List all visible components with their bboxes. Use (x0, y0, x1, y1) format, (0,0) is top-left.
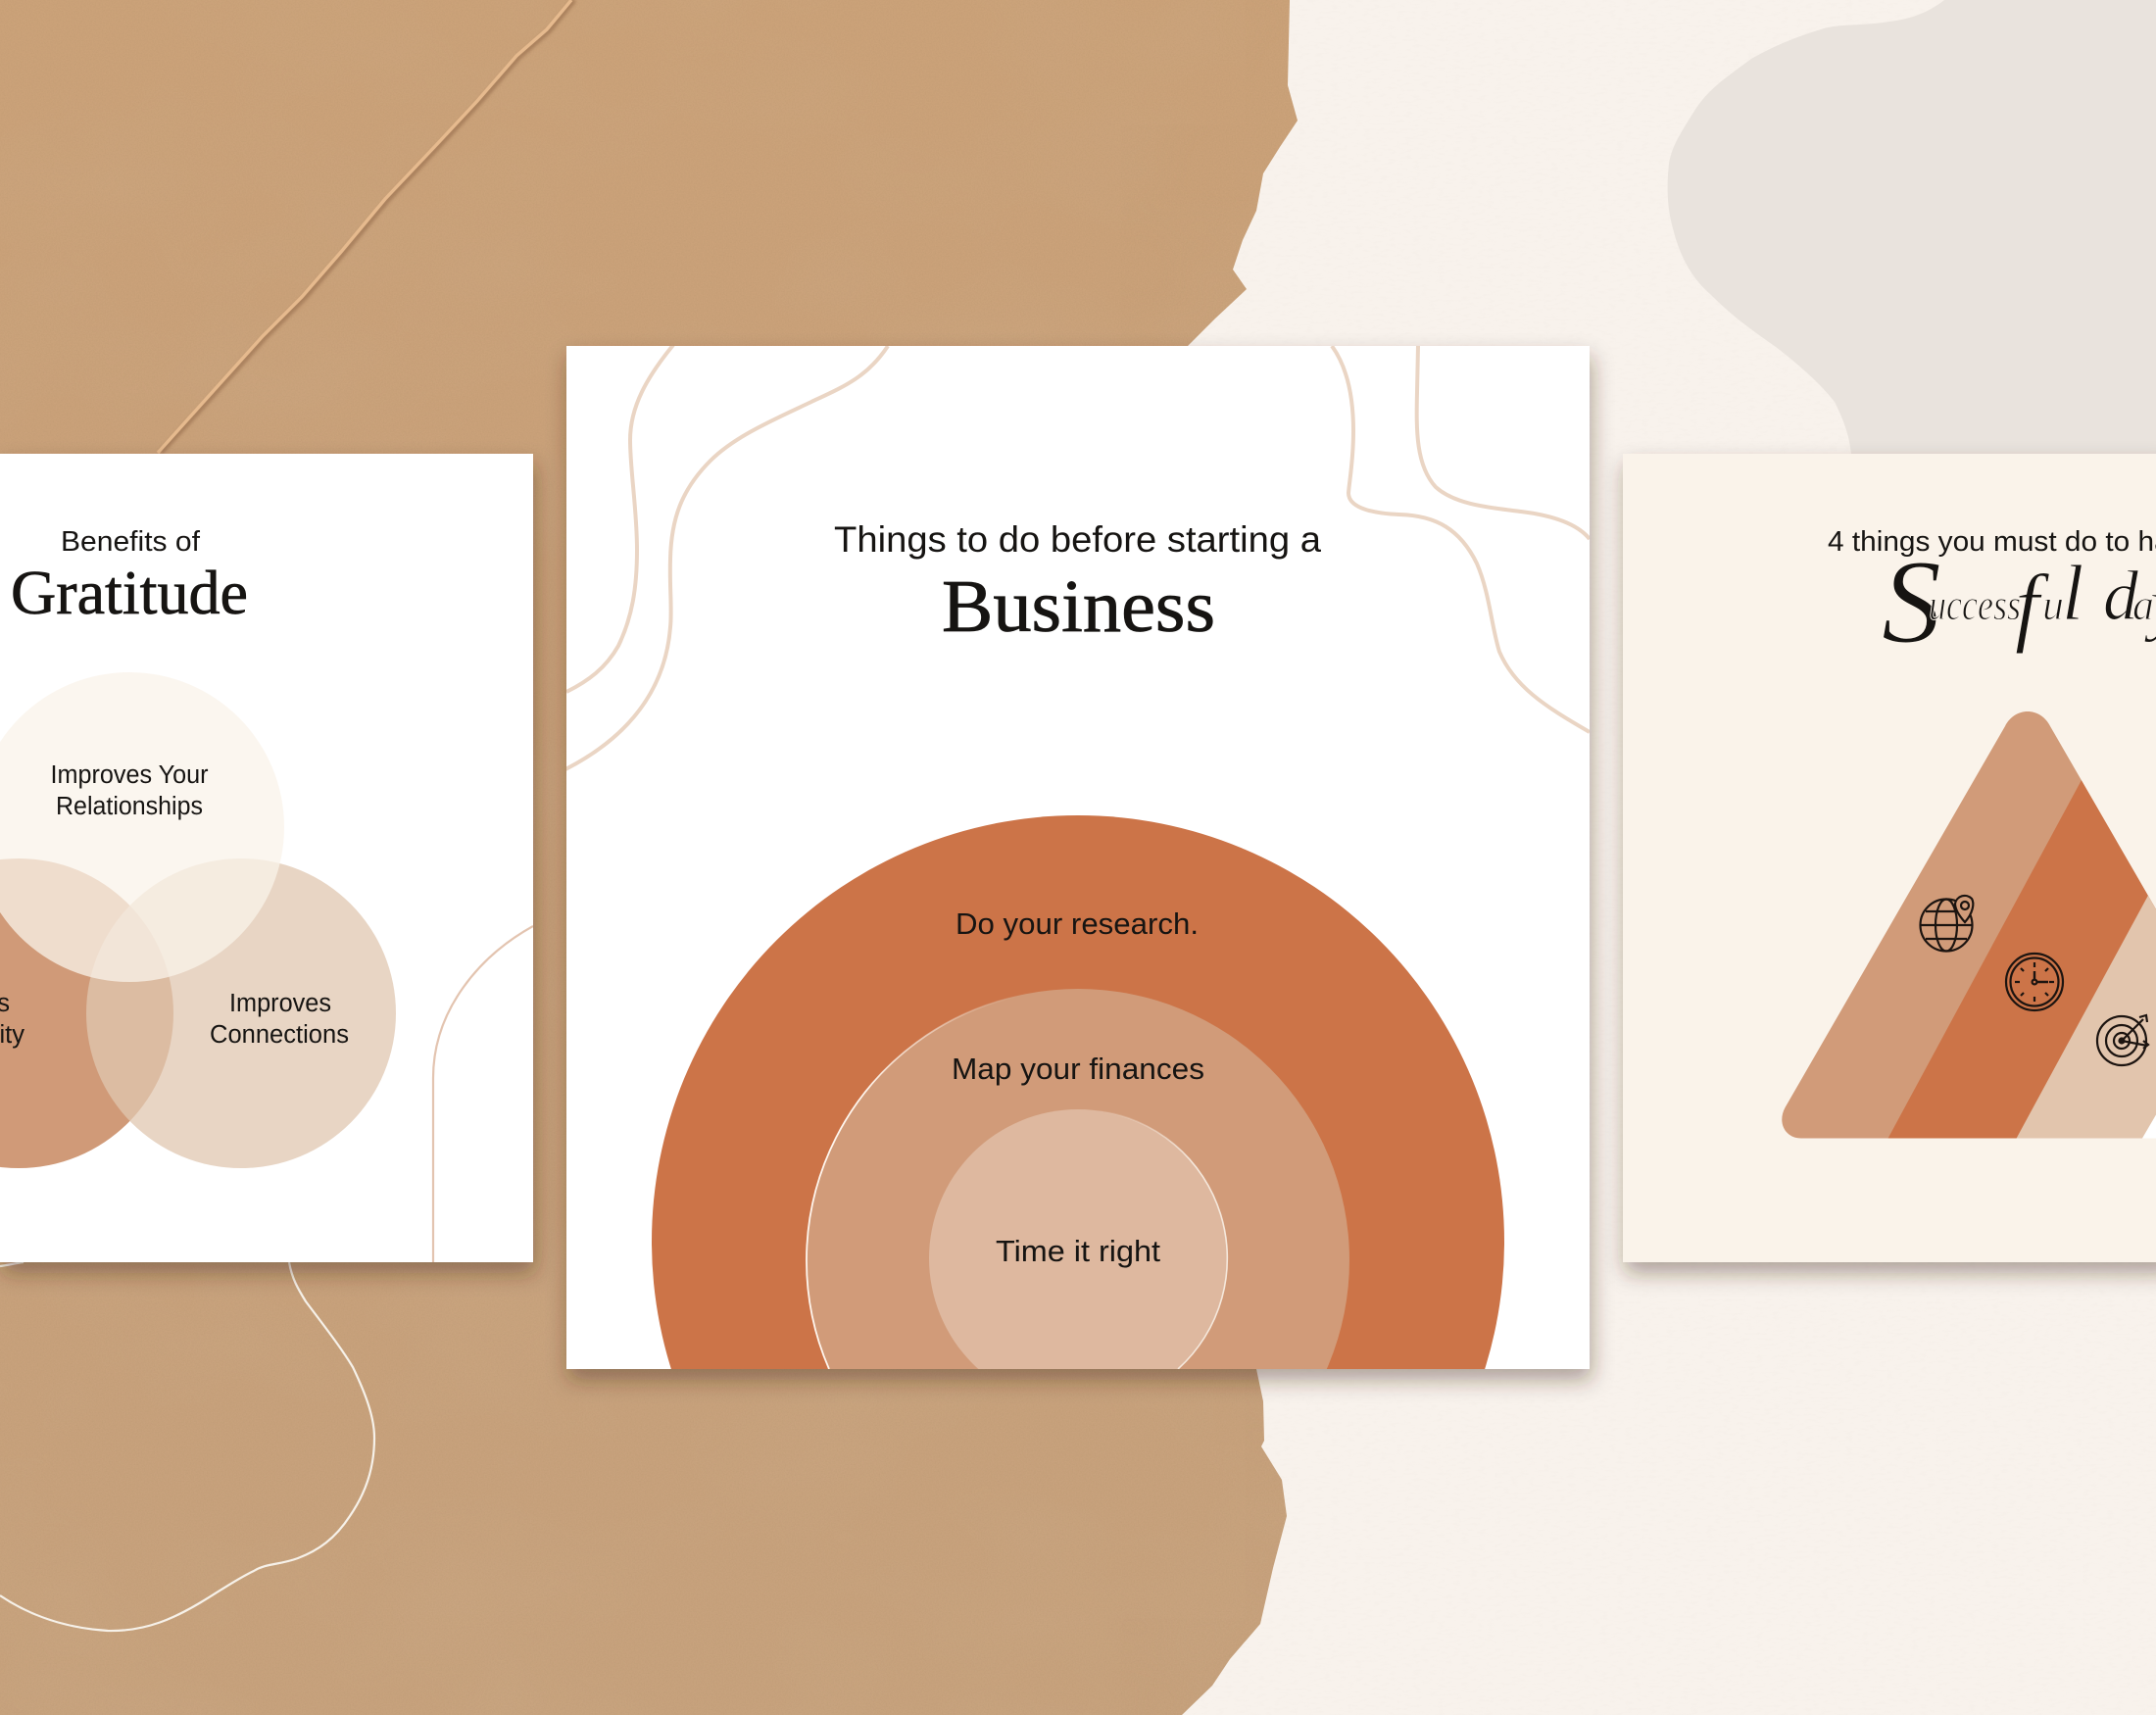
venn label: relationships: Relationships (56, 793, 203, 820)
heading: successful day script: l (2062, 551, 2083, 637)
band 1 (1754, 686, 2156, 1147)
band 4 (2137, 1014, 2156, 1147)
heading: things to do: Things to do before starting a (834, 519, 1321, 560)
heading: successful day script: S (1882, 536, 1941, 668)
pyramid diagram (1782, 711, 2156, 1139)
label: finances: Map your finances (952, 1052, 1204, 1086)
venn circle: relationships (0, 672, 284, 982)
heading: successful day script: d (2103, 557, 2139, 635)
venn circle: productivity (0, 858, 173, 1168)
inner circle (929, 1109, 1227, 1369)
heading: successful day script: u (2042, 581, 2064, 629)
outer ring (652, 815, 1504, 1369)
panel: Things to do before starting a Business card (557, 343, 1605, 1394)
background: torn kraft paper (0, 0, 1313, 1715)
venn label: relationships: Improves Your (51, 761, 209, 789)
heading: gratitude: Gratitude (11, 558, 248, 627)
heading: benefits of: Benefits of (61, 526, 201, 558)
middle ring highlight (807, 996, 1019, 1369)
band 2 (1884, 755, 2156, 1147)
concentric semicircle chart (652, 815, 1504, 1369)
inner circle highlight (1098, 1110, 1227, 1369)
band 3 (2012, 868, 2156, 1147)
icon: clock (2006, 954, 2063, 1010)
venn diagram (0, 672, 396, 1168)
decorative contour lines (565, 345, 1590, 769)
heading: successful day script: uccess (1929, 581, 2021, 629)
panel: Benefits of Gratitude card (0, 454, 533, 1262)
venn label: connections: Connections (210, 1021, 349, 1049)
icon: globe with pin (1921, 896, 1973, 951)
panel: 4 things Successful day card (1623, 454, 2156, 1262)
heading: successful day script: f (2015, 558, 2050, 655)
middle ring (808, 989, 1349, 1369)
icon: target with arrows (2097, 1015, 2148, 1065)
heading: business: Business (942, 565, 1215, 648)
label: research: Do your research. (956, 906, 1199, 941)
venn circle: connections (86, 858, 396, 1168)
background: grey organic blob (1668, 0, 2156, 608)
venn label: connections: Improves (229, 990, 331, 1017)
decorative white thread on kraft (0, 1262, 374, 1631)
label: timing: Time it right (996, 1234, 1160, 1268)
decorative arch line (433, 926, 533, 1262)
heading: successful day script: a (2132, 581, 2154, 629)
